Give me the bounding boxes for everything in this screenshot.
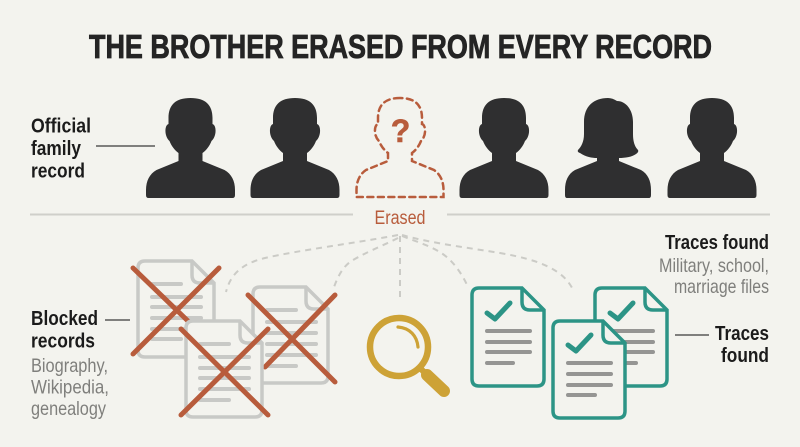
label: blocked records: Blocked (31, 307, 98, 330)
label: traces found heading: Traces found (665, 231, 769, 254)
red cross on document B (181, 329, 268, 415)
verified document 2 (595, 288, 667, 386)
blocked document A (138, 261, 214, 357)
silhouette: family member 4 (460, 98, 548, 198)
silhouette: family member 5, woman (565, 98, 651, 198)
icon: magnifying glass (370, 318, 444, 391)
label: traces found callout (675, 322, 769, 367)
label: blocked records: Biography, (31, 355, 108, 377)
verified document 1 (472, 288, 544, 386)
blocked document B (186, 321, 262, 417)
silhouette: family member 1 (146, 98, 235, 198)
label: official family record: Official (31, 114, 91, 138)
label: traces found callout: Traces (715, 322, 769, 345)
label: traces found callout: found (721, 344, 769, 367)
label: official family record: record (31, 160, 85, 182)
label: official family record (31, 114, 155, 182)
erased silhouette with question mark (356, 98, 444, 197)
erased silhouette with question mark: ? (391, 113, 410, 149)
label: blocked records (31, 307, 130, 420)
label: erased: Erased (374, 208, 426, 229)
blocked document C (253, 287, 328, 383)
label: traces found heading: Military, school, (659, 255, 769, 277)
label: blocked records: Wikipedia, (31, 376, 109, 398)
label: official family record: family (31, 137, 82, 160)
red crosses on documents A and C (133, 268, 335, 382)
silhouette: family member 2 (250, 98, 340, 198)
label: traces found heading (659, 231, 769, 298)
verified document 3 (553, 321, 625, 418)
dashed connectors (226, 235, 574, 301)
silhouette: family member 6 (668, 98, 756, 198)
label: traces found heading: marriage files (674, 276, 769, 298)
label: blocked records: records (31, 330, 95, 352)
label: blocked records: genealogy (31, 398, 106, 420)
silhouette row: official family (146, 98, 756, 198)
divider (30, 214, 770, 216)
